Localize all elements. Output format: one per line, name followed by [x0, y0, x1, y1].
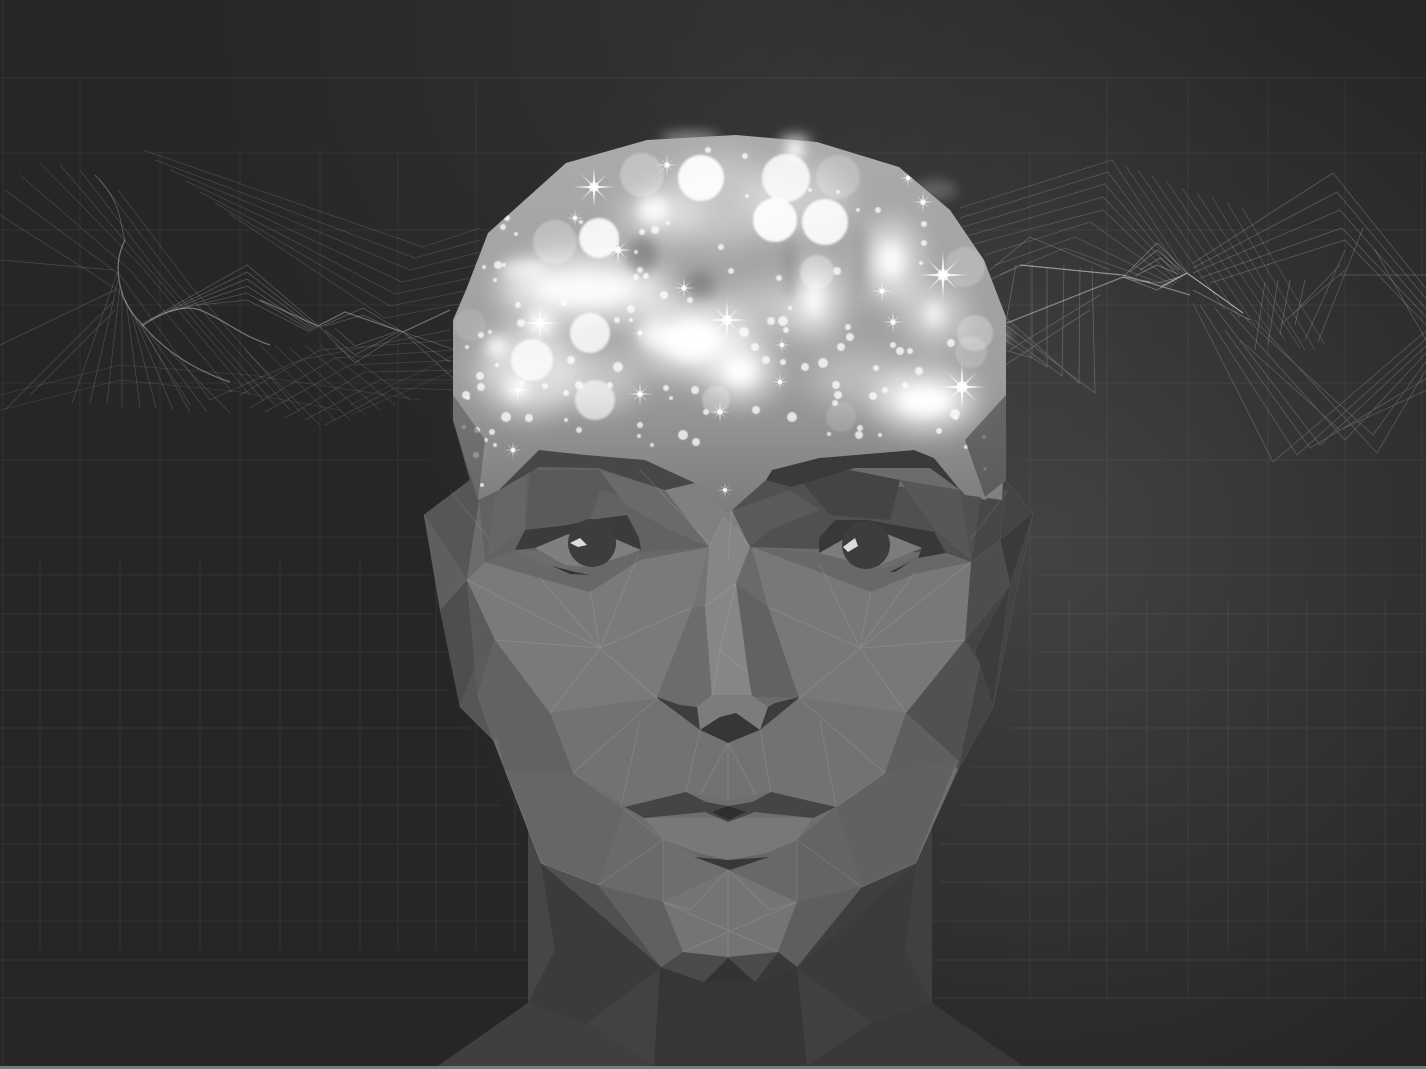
mouth [625, 792, 836, 870]
wave mesh: right [960, 160, 1426, 462]
cheek: right [752, 547, 971, 713]
nose base [700, 713, 760, 743]
nose [657, 517, 799, 743]
temple shading: left [453, 395, 485, 500]
ears and side planes [424, 400, 1033, 770]
brow: left [499, 450, 695, 490]
small sparkle dots [462, 147, 986, 470]
cheek: left [467, 547, 709, 713]
nostril: right [760, 697, 799, 730]
neck [438, 820, 1023, 1066]
eye: left [515, 515, 641, 575]
temple shading: right [965, 395, 1006, 497]
head base silhouette [424, 320, 1033, 982]
brain outer glow [458, 132, 1009, 428]
wave mesh: left [0, 150, 480, 425]
chin shadow [661, 952, 797, 982]
under-eye shadows [485, 547, 971, 592]
brain bokeh [440, 125, 1020, 515]
bottom edge band [0, 1066, 1426, 1069]
lower face [493, 698, 958, 967]
brow: right [766, 450, 960, 490]
nostril: left [657, 697, 700, 730]
nose bridge strip [665, 483, 750, 547]
brow plane: left [479, 450, 709, 562]
large bokeh discs [454, 153, 993, 432]
sparkle between brows [480, 480, 735, 500]
facial mesh lines [450, 470, 1008, 957]
forehead [453, 320, 1006, 512]
star flares [502, 152, 990, 461]
head [424, 320, 1033, 1066]
jaw band: right [797, 863, 916, 967]
jaw band: left [541, 863, 661, 967]
eye: right [819, 520, 946, 572]
brow plane: right [732, 470, 981, 562]
soft mottling [480, 155, 975, 430]
glowing brain [440, 125, 1020, 515]
